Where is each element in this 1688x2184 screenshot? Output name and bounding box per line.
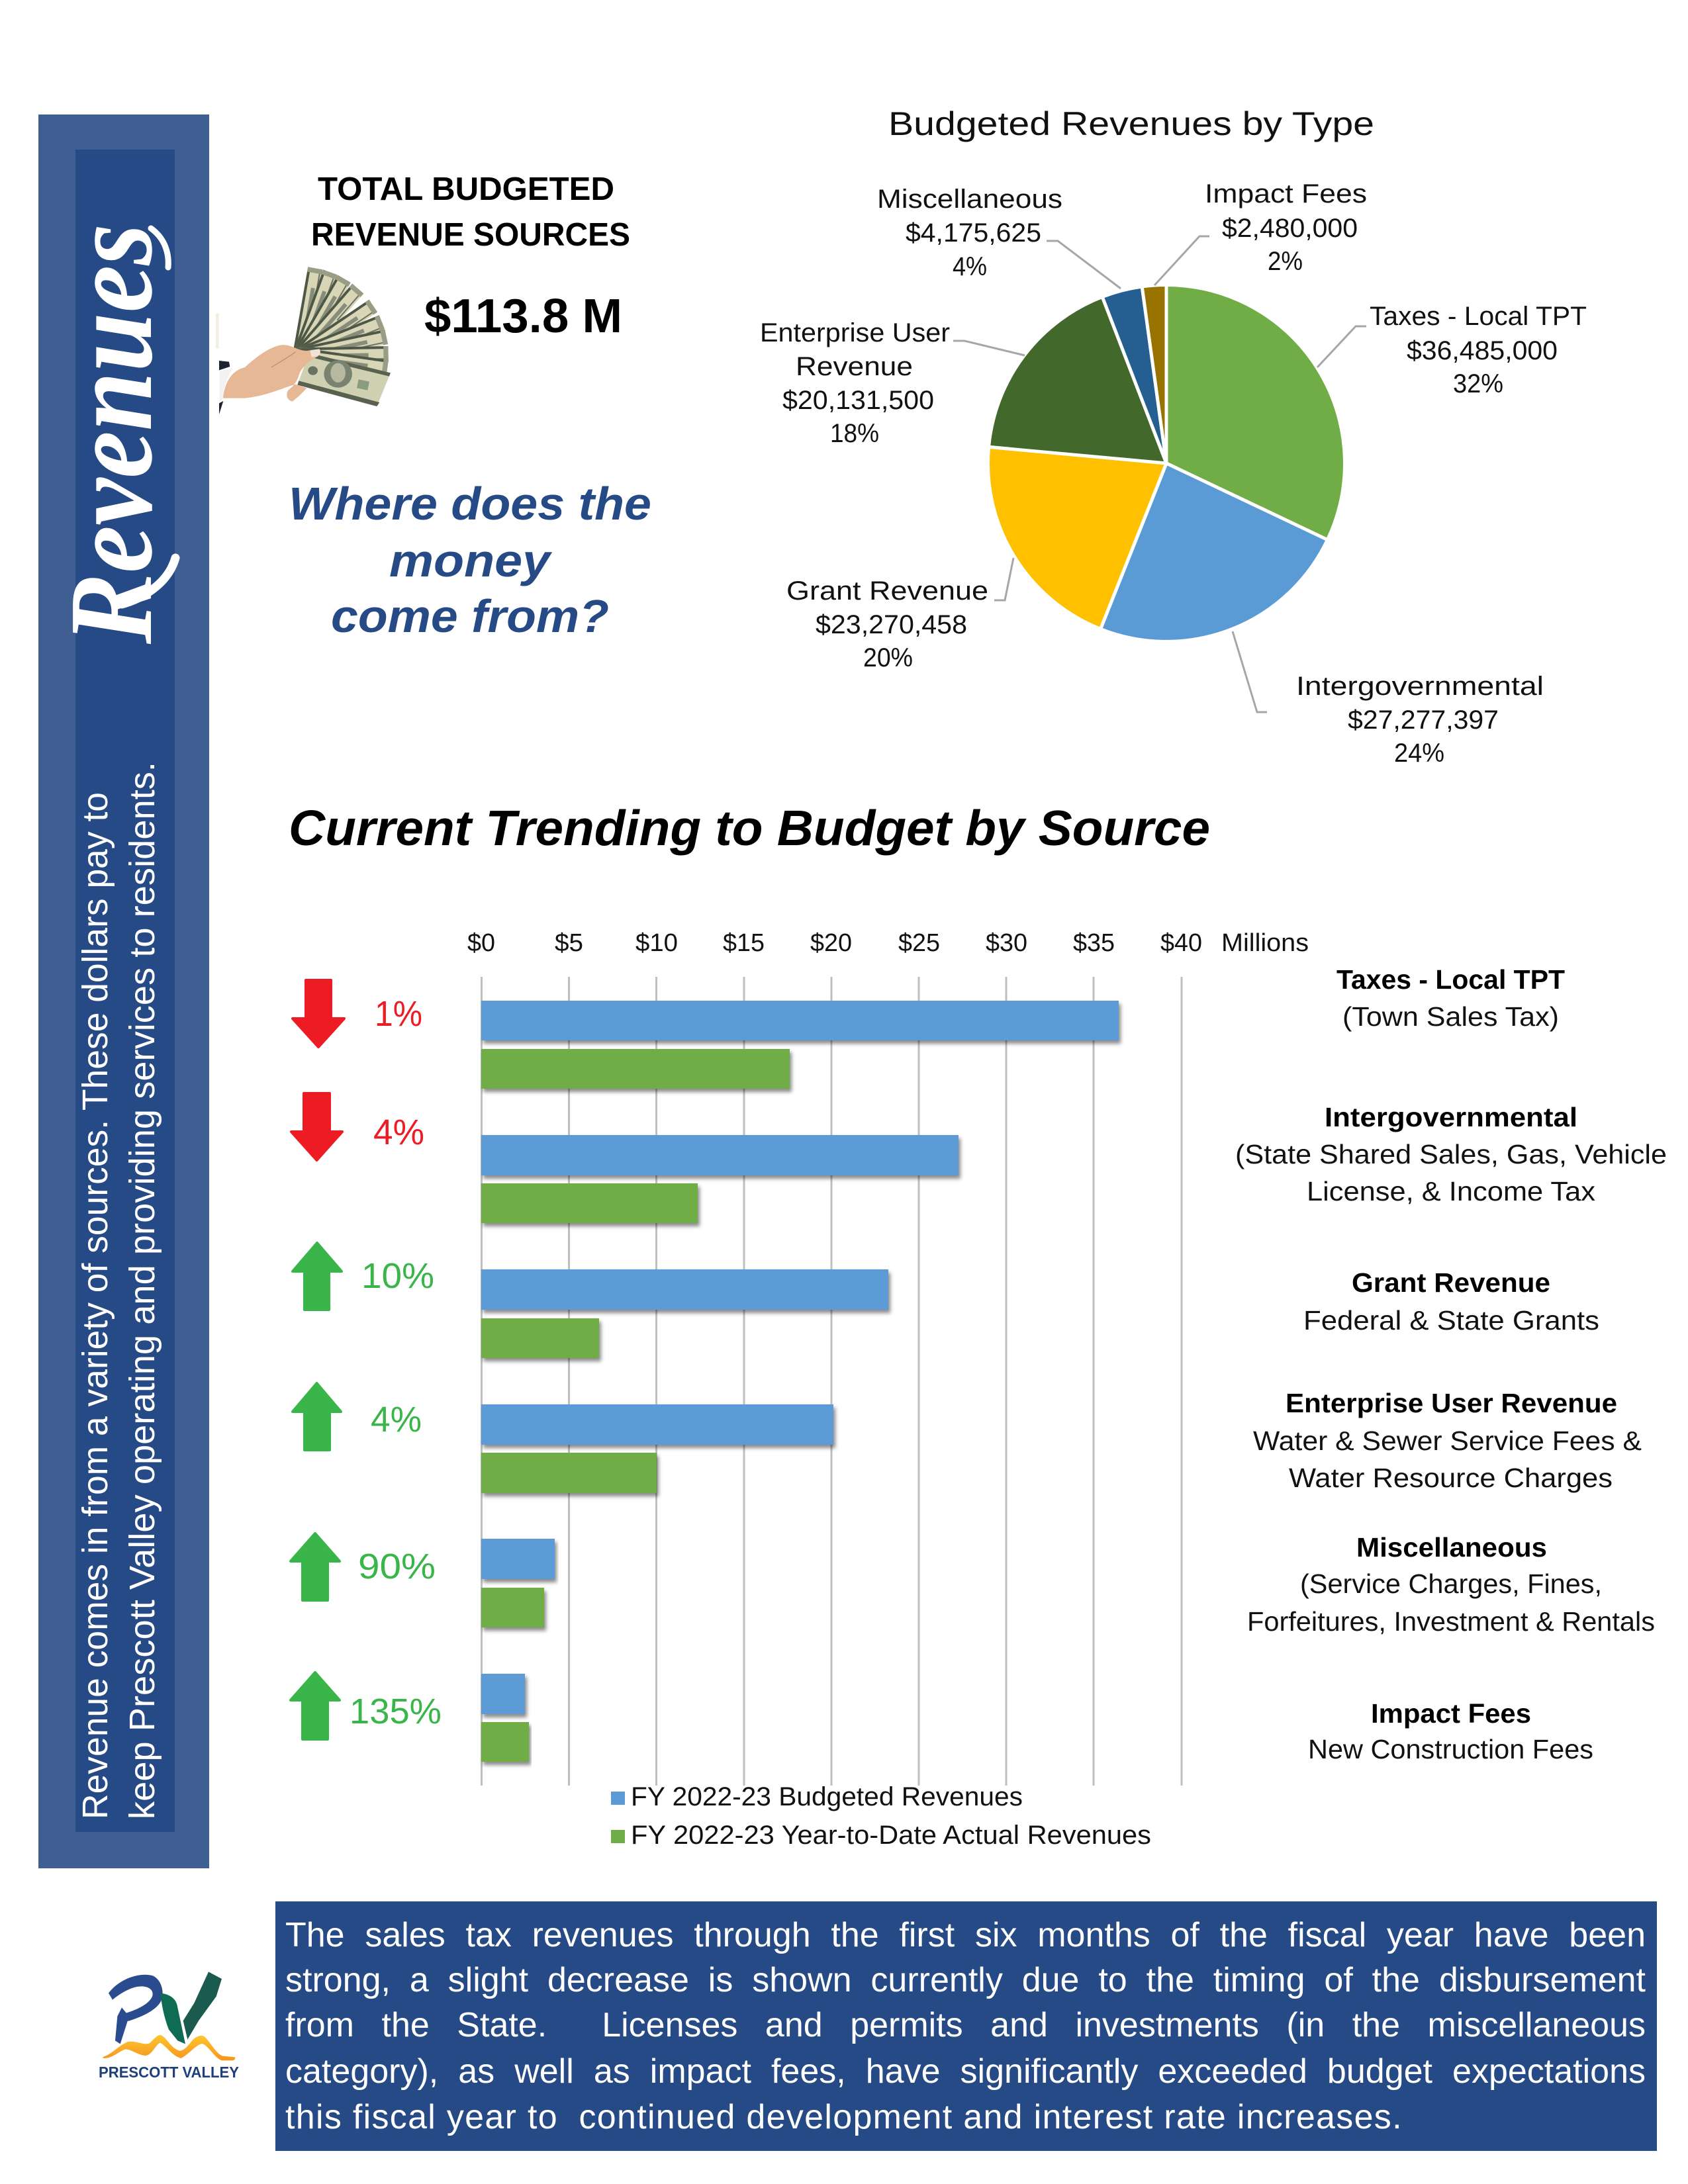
pie label: grant: Grant Revenue bbox=[786, 576, 988, 606]
bar chart axis labels: Millions bbox=[1221, 929, 1309, 957]
bar chart axis labels: $35 bbox=[1073, 929, 1115, 957]
source label: taxes: (Town Sales Tax) bbox=[1342, 1001, 1559, 1032]
pie label: enterprise: 18% bbox=[830, 419, 879, 448]
panel: summary note: from the State. Licenses and permits and investments (in the miscellaneous bbox=[285, 2006, 1646, 2044]
icon: hand holding money bbox=[216, 267, 391, 414]
pie label: taxes bbox=[1370, 302, 1587, 398]
bar chart axis labels: $25 bbox=[898, 929, 940, 957]
panel: summary note bbox=[275, 1901, 1657, 2151]
legend bbox=[611, 1782, 1151, 1850]
heading: current trending: Current Trending to Budget by Source bbox=[289, 800, 1210, 856]
bar chart axis labels: $5 bbox=[555, 929, 583, 957]
pie label: intergovernmental: $27,277,397 bbox=[1348, 705, 1499, 735]
pie label: intergovernmental bbox=[1296, 672, 1544, 768]
source label: enterprise: Water & Sewer Service Fees & bbox=[1253, 1426, 1642, 1456]
trend: intergovernmental down 4%: 4% bbox=[373, 1113, 424, 1152]
bar chart axis labels: $40 bbox=[1160, 929, 1202, 957]
legend: FY 2022-23 Year-to-Date Actual Revenues bbox=[631, 1821, 1151, 1850]
pie label: intergovernmental: 24% bbox=[1394, 739, 1444, 768]
pie slices bbox=[988, 285, 1344, 641]
bar chart axis labels bbox=[467, 929, 1309, 957]
source label: impact fees: Impact Fees bbox=[1371, 1698, 1531, 1729]
source label: enterprise: Enterprise User Revenue bbox=[1286, 1388, 1617, 1418]
sidebar title: Revenues: Revenues bbox=[45, 224, 177, 645]
source label: miscellaneous: Miscellaneous bbox=[1356, 1532, 1547, 1563]
trend: grant up 10%: 10% bbox=[361, 1256, 434, 1296]
trend: miscellaneous up 90%: 90% bbox=[358, 1547, 436, 1586]
source label: grant: Federal & State Grants bbox=[1303, 1305, 1599, 1336]
heading: where does the money come from bbox=[289, 478, 651, 642]
pie label: impact fees: 2% bbox=[1268, 247, 1303, 276]
source label: impact fees bbox=[1308, 1698, 1593, 1764]
total amount: $113.8 M bbox=[424, 290, 622, 343]
bar chart axis labels: $0 bbox=[467, 929, 495, 957]
pie label: grant: 20% bbox=[863, 643, 913, 672]
sidebar text block: Revenue comes in from a variety of sources. These dollars pay to bbox=[75, 792, 115, 1819]
pie label: taxes: 32% bbox=[1453, 369, 1503, 398]
source label: intergovernmental bbox=[1235, 1102, 1667, 1206]
trend: taxes down 1%: 1% bbox=[375, 994, 422, 1034]
panel: summary note: this fiscal year to continued development and interest rate increases. bbox=[285, 2098, 1403, 2136]
logo: Prescott Valley bbox=[99, 1972, 239, 2081]
bars: taxes bbox=[481, 1001, 1119, 1089]
trend: taxes down 1% bbox=[293, 980, 422, 1047]
pie label: enterprise: Enterprise User bbox=[760, 318, 950, 347]
source label: impact fees: New Construction Fees bbox=[1308, 1734, 1593, 1764]
heading: total budgeted revenue sources: TOTAL BUDGETED bbox=[318, 171, 614, 207]
heading: total budgeted revenue sources: REVENUE SOURCES bbox=[311, 217, 630, 253]
trend: impact fees up 135%: 135% bbox=[350, 1692, 442, 1731]
pie label: miscellaneous bbox=[877, 185, 1062, 281]
bar chart axis labels: $20 bbox=[810, 929, 852, 957]
legend: FY 2022-23 Budgeted Revenues bbox=[631, 1782, 1023, 1811]
trend: miscellaneous up 90% bbox=[291, 1533, 436, 1600]
source label: intergovernmental: License, & Income Tax bbox=[1307, 1176, 1596, 1206]
bars: miscellaneous bbox=[481, 1539, 555, 1627]
pie chart title: Budgeted Revenues by Type bbox=[888, 105, 1374, 142]
trend: enterprise up 4%: 4% bbox=[371, 1400, 422, 1439]
pie label: miscellaneous: Miscellaneous bbox=[877, 185, 1062, 214]
source label: miscellaneous: (Service Charges, Fines, bbox=[1300, 1569, 1602, 1599]
sidebar inner band bbox=[75, 150, 175, 1832]
bar chart axis labels: $30 bbox=[986, 929, 1027, 957]
heading: where does the money come from: Where does the bbox=[289, 478, 651, 529]
panel: pie chart bbox=[760, 105, 1587, 768]
panel: bar chart bbox=[467, 929, 1309, 1850]
pie label: grant: $23,270,458 bbox=[816, 610, 967, 639]
source label: intergovernmental: (State Shared Sales, Gas, Vehicle bbox=[1235, 1139, 1667, 1169]
source label: taxes bbox=[1336, 964, 1565, 1032]
pie label: impact fees: $2,480,000 bbox=[1222, 214, 1358, 243]
trend: grant up 10% bbox=[293, 1243, 434, 1310]
sidebar text block: keep Prescott Valley operating and providing services to residents. bbox=[122, 762, 162, 1819]
pie label: miscellaneous: 4% bbox=[953, 252, 987, 281]
source label: miscellaneous: Forfeitures, Investment & Rentals bbox=[1247, 1606, 1655, 1637]
panel: summary note: strong, a slight decrease is shown currently due to the timing of the disbursement bbox=[285, 1961, 1646, 1999]
source label: grant: Grant Revenue bbox=[1352, 1267, 1550, 1298]
pie label: taxes: $36,485,000 bbox=[1407, 336, 1558, 365]
source label: enterprise: Water Resource Charges bbox=[1289, 1463, 1613, 1493]
heading: total budgeted revenue sources bbox=[311, 171, 630, 253]
source label: taxes: Taxes - Local TPT bbox=[1336, 964, 1565, 995]
pie label: taxes: Taxes - Local TPT bbox=[1370, 302, 1587, 331]
pie leader lines bbox=[953, 236, 1366, 712]
heading: where does the money come from: come from? bbox=[331, 590, 609, 642]
source label: enterprise bbox=[1253, 1388, 1642, 1493]
pie label: intergovernmental: Intergovernmental bbox=[1296, 672, 1544, 701]
panel: sidebar bbox=[38, 114, 209, 1868]
pie label: enterprise: Revenue bbox=[796, 352, 913, 381]
pie label: enterprise bbox=[760, 318, 950, 448]
panel: summary note: category), as well as impact fees, have significantly exceeded budget expectations bbox=[285, 2052, 1646, 2091]
bar chart axis labels: $10 bbox=[635, 929, 678, 957]
trend: intergovernmental down 4% bbox=[291, 1093, 424, 1160]
panel: summary note: The sales tax revenues through the first six months of the fiscal year have been bbox=[285, 1916, 1646, 1954]
source label: intergovernmental: Intergovernmental bbox=[1325, 1102, 1577, 1132]
trend: enterprise up 4% bbox=[293, 1383, 422, 1450]
logo: Prescott Valley: PRESCOTT VALLEY bbox=[99, 2064, 239, 2081]
sidebar text block bbox=[75, 762, 162, 1819]
bars: impact fees bbox=[481, 1674, 529, 1762]
bar chart axis labels: $15 bbox=[723, 929, 765, 957]
bars: grant bbox=[481, 1269, 888, 1358]
source label: grant bbox=[1303, 1267, 1599, 1336]
bars: enterprise bbox=[481, 1404, 833, 1493]
sidebar outer band bbox=[38, 114, 209, 1868]
source label: miscellaneous bbox=[1247, 1532, 1655, 1637]
pie label: impact fees bbox=[1205, 179, 1367, 276]
pie label: grant bbox=[786, 576, 988, 672]
pie label: enterprise: $20,131,500 bbox=[782, 386, 934, 415]
pie label: miscellaneous: $4,175,625 bbox=[906, 218, 1041, 248]
trend: impact fees up 135% bbox=[291, 1672, 442, 1739]
bars: intergovernmental bbox=[481, 1135, 959, 1223]
pie label: impact fees: Impact Fees bbox=[1205, 179, 1367, 208]
heading: where does the money come from: money bbox=[389, 535, 552, 586]
